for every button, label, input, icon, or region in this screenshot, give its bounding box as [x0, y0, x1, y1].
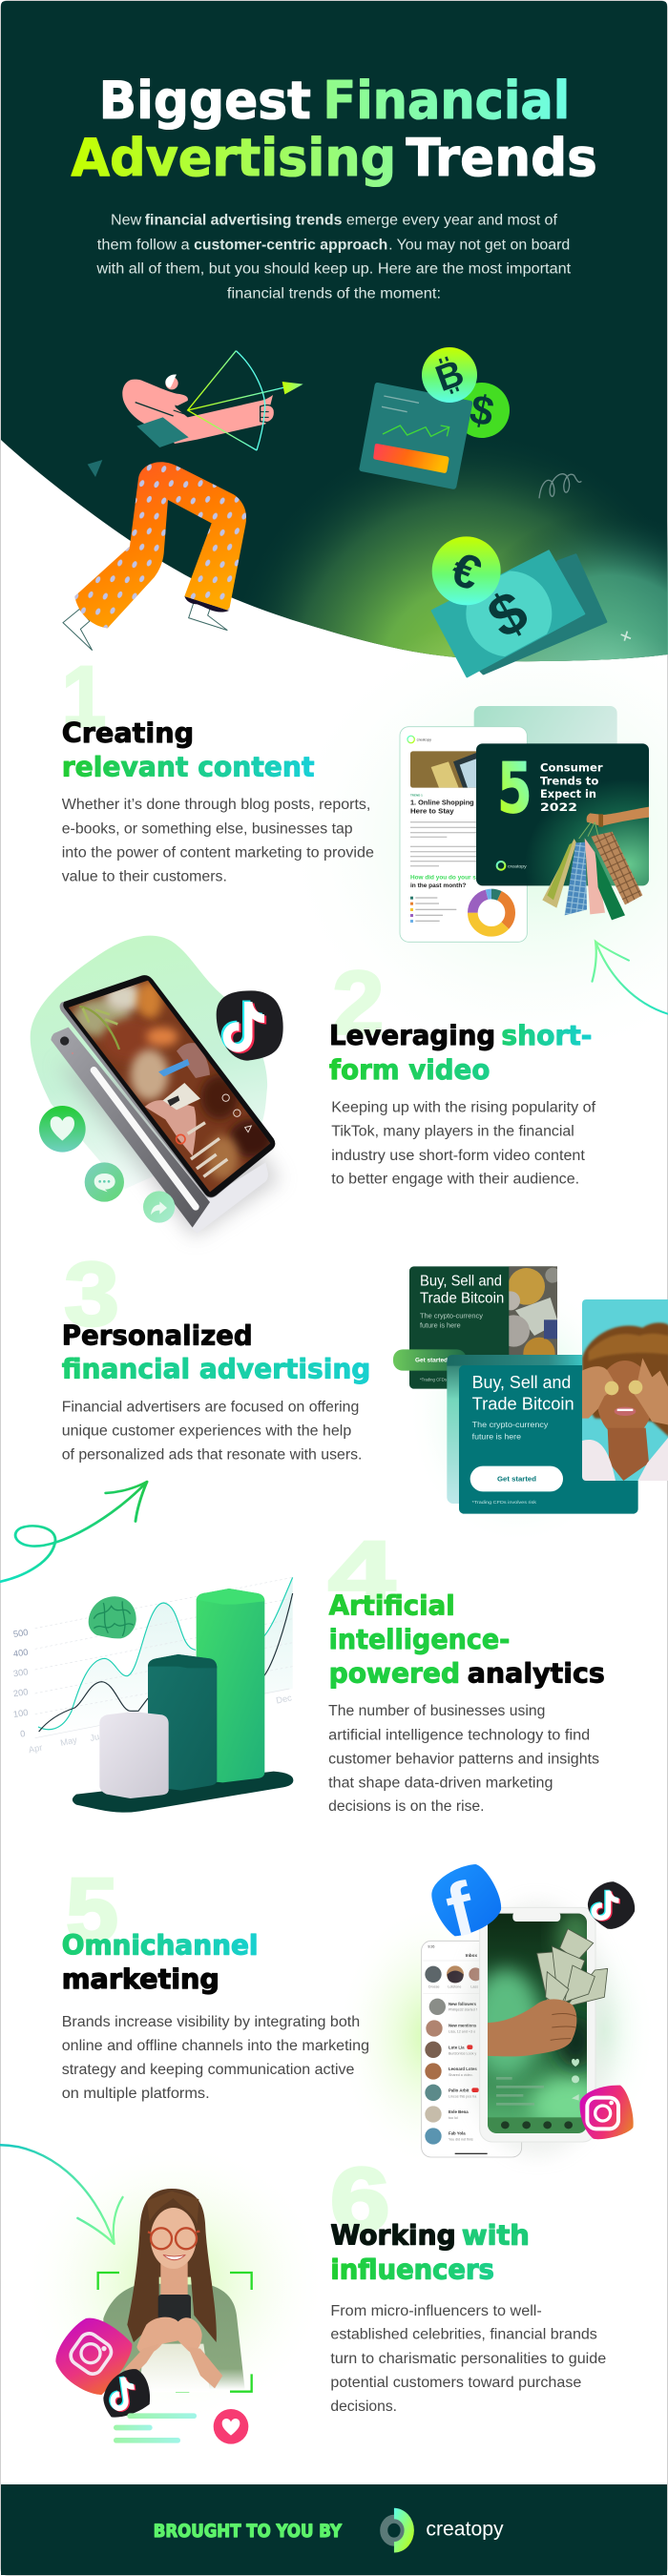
body text: Whether it’s done through blog posts, reports, [62, 796, 370, 813]
inbox phone: 9:26 [428, 1945, 434, 1949]
inbox rows: Shared a video. [449, 2073, 473, 2077]
report cover: 5 [497, 750, 532, 830]
body text: artificial intelligence technology to find [328, 1726, 590, 1743]
chart lines [35, 1577, 293, 1738]
body text: into the power of content marketing to provide [62, 844, 374, 861]
dark ad: Get started [415, 1359, 448, 1364]
body text: From micro-influencers to well- [330, 2302, 542, 2319]
donut legend [410, 897, 456, 923]
shopping bags [542, 807, 649, 920]
icon: instagram [55, 2318, 132, 2395]
axis labels: 200 [12, 1687, 29, 1698]
report cover [476, 743, 649, 885]
body text: strategy and keeping communication active [62, 2061, 354, 2078]
back tablet [51, 1028, 280, 1237]
heading: relevant content [62, 752, 314, 783]
bars [73, 1589, 293, 1813]
inbox phone [422, 1941, 522, 2157]
title: Trends [406, 127, 597, 188]
section 3: personalized financial advertising [0, 1244, 370, 1582]
body text [328, 1702, 599, 1815]
intro text block: New [111, 213, 142, 229]
decoration: triangle [88, 460, 102, 477]
body text: online and offline channels into the marketing [62, 2037, 369, 2054]
heading [330, 2220, 530, 2286]
banknotes [432, 551, 606, 676]
section 1: creating relevant content [62, 649, 374, 884]
icon: heart bubble [39, 1106, 86, 1153]
body text: e-books, or something else, businesses tap [62, 821, 353, 837]
axis labels: Apr [28, 1742, 43, 1755]
creatopy logo [384, 2508, 504, 2553]
body text [62, 2013, 369, 2102]
teal ad: *Trading CFDs involves risk [472, 1500, 537, 1506]
heading: Personalized [62, 1320, 253, 1352]
bow and arrow [188, 351, 303, 450]
inbox rows: New followers [449, 2002, 477, 2006]
title [72, 70, 597, 188]
report page: Here to Stay [410, 808, 454, 815]
axis labels: 0 [20, 1729, 26, 1739]
arrow: to report [592, 942, 668, 1014]
report page: in the past month? [410, 883, 466, 889]
dark ad [393, 1266, 560, 1389]
body text: of personalized ads that resonate with users. [62, 1446, 362, 1463]
woman with coins photo [582, 1299, 668, 1481]
inbox phone: Drosse [428, 1985, 440, 1989]
section 6: working with influencers [0, 2140, 606, 2425]
number 4: 4 [328, 1523, 395, 1621]
report cover: 2022 [540, 800, 577, 814]
section 2: leveraging short-form video [329, 952, 595, 1187]
body text: Keeping up with the rising popularity of [331, 1098, 595, 1115]
inbox rows: Leonard Lotes [449, 2067, 477, 2071]
line chart with 3d bars [12, 1577, 293, 1813]
icon: like heart [214, 2409, 248, 2444]
teal ad: Buy, Sell and [472, 1372, 571, 1392]
body text: potential customers toward purchase [330, 2374, 581, 2391]
dark ad: future is here [420, 1320, 461, 1329]
chart document [359, 383, 472, 489]
axis labels: 500 [12, 1628, 29, 1639]
intro text block: . You may not get on board [388, 238, 570, 254]
illustration: archer [63, 351, 303, 651]
body text: The number of businesses using [328, 1702, 545, 1719]
dark ad: Buy, Sell and [420, 1273, 502, 1289]
inbox rows: Fab Yola [449, 2131, 466, 2136]
icon: tiktok [588, 1881, 635, 1929]
torso and arms [122, 374, 275, 447]
section 4: artificial intelligence-powered analytics [328, 1523, 605, 1815]
video phone [461, 1901, 614, 2156]
number 3: 3 [64, 1244, 119, 1345]
arrow: looped upward [0, 1482, 147, 1582]
teal ad: Trade Bitcoin [472, 1394, 574, 1414]
pants [74, 462, 246, 628]
body text: TikTok, many players in the financial [331, 1122, 574, 1139]
heading: Omnichannel [62, 1930, 259, 1962]
heading: influencers [330, 2254, 494, 2286]
arrow: downward to influencer [0, 2145, 123, 2244]
icon: share bubble [143, 1191, 175, 1223]
icon: brain [89, 1596, 136, 1638]
front tablet [60, 975, 275, 1198]
report cover: Expect in [540, 787, 596, 800]
report cover: creatopy [508, 863, 527, 869]
report page [400, 727, 527, 942]
heading [62, 718, 314, 783]
intro text block: customer-centric approach [194, 238, 387, 254]
intro text block: emerge every year and most of [346, 213, 558, 229]
decoration: scribble and cross [539, 474, 631, 641]
heading: financial advertising [62, 1354, 370, 1385]
dark ad: Trade Bitcoin [420, 1291, 504, 1307]
number 1: 1 [62, 649, 106, 745]
screen glow and controls [488, 1914, 587, 2133]
intro text block: financial trends of the moment: [227, 285, 441, 301]
inbox phone: Lotstone [448, 1985, 461, 1989]
heading: with [462, 2220, 530, 2252]
body text: that shape data-driven marketing [328, 1774, 553, 1791]
teal ad [447, 1355, 638, 1514]
report mockup [400, 706, 649, 942]
teal ad: Get started [497, 1474, 536, 1483]
stylus [94, 1070, 196, 1207]
icon: bitcoin coin [422, 347, 477, 403]
inbox rows: Evle Bena [449, 2109, 469, 2114]
hand holding money [488, 1929, 608, 2056]
icon: dollar coin: $ [466, 386, 498, 436]
creatopy logo: creatopy [426, 2519, 504, 2541]
title: Financial [323, 70, 570, 131]
heading: powered [329, 1658, 460, 1690]
illustration: tablet with tiktok [31, 936, 283, 1237]
inbox rows: You did not finis [449, 2138, 473, 2142]
axis labels: May [59, 1735, 78, 1748]
body text: decisions is on the rise. [328, 1797, 485, 1815]
number 2: 2 [332, 952, 385, 1053]
woman [103, 2189, 245, 2392]
body text: to better engage with their audience. [331, 1171, 579, 1187]
heading [62, 1930, 259, 1996]
footer tagline: BROUGHT TO YOU BY [154, 2522, 342, 2542]
icon: chat bubble [85, 1162, 124, 1202]
body text: Brands increase visibility by integrating both [62, 2013, 360, 2030]
dark ad: *Trading CFDs [420, 1378, 447, 1382]
intro text block: financial advertising trends [145, 213, 343, 229]
heading [329, 1590, 605, 1690]
ad mockups [393, 1266, 668, 1514]
illustration: influencer with phone [55, 2189, 252, 2444]
heading: intelligence- [329, 1625, 510, 1656]
inbox rows: Palio Arbit [449, 2088, 470, 2092]
inbox rows [425, 1999, 479, 2145]
background blob [31, 936, 267, 1190]
heading: short- [501, 1021, 592, 1052]
body text [331, 1098, 595, 1187]
title: Advertising [72, 127, 396, 188]
page soft glow: section 1 [277, 611, 668, 1069]
body text: customer behavior patterns and insights [328, 1750, 599, 1767]
teal ad: The crypto-currency [472, 1420, 549, 1429]
heading: marketing [62, 1964, 219, 1996]
panel: dark hero header [1, 1, 668, 662]
body text: value to their customers. [62, 868, 227, 884]
axis labels: 100 [12, 1708, 29, 1719]
axis labels: 400 [12, 1648, 29, 1659]
icon: shoes [63, 599, 227, 651]
axis labels: Dec [275, 1693, 293, 1706]
icon: instagram [580, 2086, 634, 2139]
tablet screen photo [69, 981, 271, 1193]
inbox rows: Lisa, 12 and +3 o [449, 2030, 475, 2034]
report cover: Trends to [540, 774, 599, 787]
icon: facebook: f [438, 1865, 484, 1953]
body text: turn to charismatic personalities to guide [330, 2350, 606, 2367]
body text [62, 796, 374, 884]
body text: on multiple platforms. [62, 2085, 210, 2102]
axis labels: Ju [89, 1732, 100, 1743]
body text: decisions. [330, 2398, 397, 2415]
axis labels [12, 1628, 293, 1755]
body text: Financial advertisers are focused on offering [62, 1398, 359, 1415]
inbox phone: Inbox [466, 1953, 477, 1958]
heading: Creating [62, 718, 194, 750]
body text: established celebrities, financial brands [330, 2326, 597, 2343]
inbox rows: Buri2ontos Look y [449, 2051, 476, 2055]
inbox rows: Lincos this pos ha [449, 2095, 477, 2099]
report page: How did you do your sl [410, 875, 478, 882]
body text: unique customer experiences with the help [62, 1422, 351, 1439]
icon: tiktok [217, 990, 283, 1061]
inbox rows: New mentions [449, 2023, 477, 2027]
body text: industry use short-form video content [331, 1147, 585, 1164]
heading [62, 1320, 370, 1385]
report cover: Consumer [540, 760, 603, 774]
number 5: 5 [66, 1860, 118, 1961]
teal ad: future is here [472, 1432, 521, 1442]
icon: tiktok [103, 2369, 150, 2418]
inbox rows: Phillips32 started f [449, 2008, 478, 2012]
heading: Artificial [329, 1590, 455, 1622]
inbox rows: too lol [449, 2116, 458, 2120]
banknotes: $ [477, 578, 538, 652]
body text [62, 1398, 362, 1463]
report page: creatopy [417, 737, 431, 741]
report page: 1. Online Shopping [410, 800, 474, 806]
title: Biggest [99, 70, 311, 131]
axis labels: 300 [12, 1667, 29, 1678]
donut chart [472, 894, 511, 931]
heading: form video [329, 1054, 490, 1086]
inbox rows: Lute Lia [449, 2045, 465, 2049]
intro text block: with all of them, but you should keep up. Here are the most important [95, 261, 572, 278]
footer band [1, 2484, 667, 2575]
icon: facebook [431, 1864, 501, 1953]
comment lines [114, 2413, 197, 2443]
number 6: 6 [330, 2150, 389, 2251]
icon: euro coin [432, 536, 501, 605]
heading: analytics [468, 1658, 605, 1690]
icon: dollar coin [454, 383, 510, 438]
phone mockups and social icons [422, 1864, 635, 2157]
body text [330, 2302, 606, 2415]
heading: Working [330, 2220, 456, 2252]
intro text block [95, 213, 572, 301]
report, coins and banknotes illustration [359, 347, 631, 676]
dark ad: The crypto-currency [420, 1312, 483, 1320]
report page: TREND 1 [410, 793, 423, 797]
icon: bitcoin coin: B [430, 352, 470, 400]
intro text block: them follow a [97, 238, 190, 254]
inbox phone: Lass [470, 1985, 478, 1989]
icon: euro coin: € [444, 541, 489, 601]
section 5: omnichannel marketing [62, 1860, 656, 2169]
focus brackets [98, 2273, 252, 2392]
heading [329, 1021, 592, 1086]
heading: Leveraging [329, 1021, 495, 1052]
